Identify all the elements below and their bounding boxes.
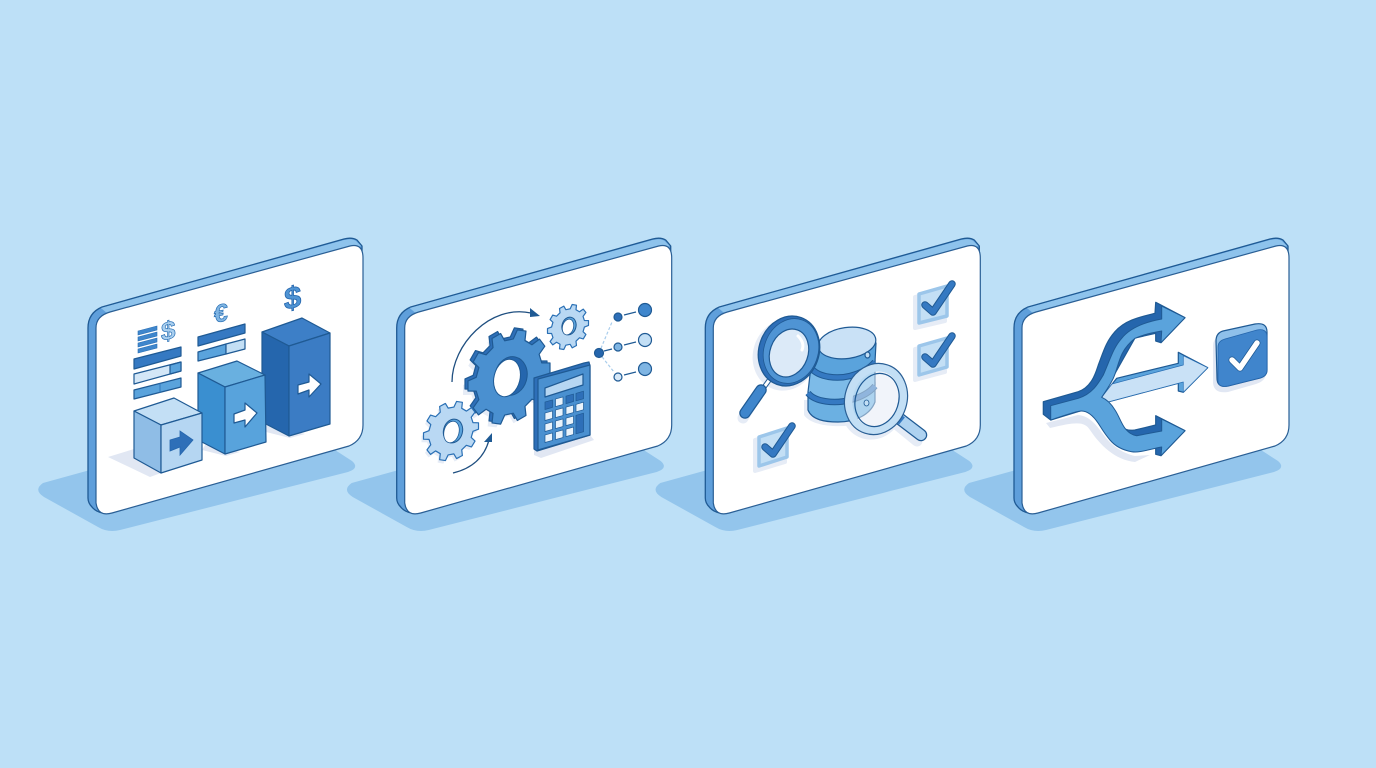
card shadow <box>964 450 1281 531</box>
fork shadow <box>1046 415 1150 462</box>
euro symbol: € <box>214 298 228 329</box>
medium cube <box>198 361 266 454</box>
check tile <box>1213 324 1267 392</box>
lower rotation arrow <box>453 433 492 473</box>
card slab <box>705 238 979 513</box>
card shadow <box>656 450 972 531</box>
card face <box>405 246 672 514</box>
card slab <box>1014 238 1288 513</box>
panel: branching decision <box>964 238 1289 531</box>
panel: gears and calculator <box>347 238 672 531</box>
card slab <box>397 238 671 513</box>
panel: cost bars <box>38 238 363 531</box>
calculator keys <box>545 391 584 442</box>
fork dark sides <box>1043 302 1185 456</box>
magnifier left <box>745 307 829 413</box>
large gear <box>463 321 550 435</box>
card shadow <box>347 450 664 531</box>
checkbox top <box>915 284 952 328</box>
fork front face <box>1051 306 1185 456</box>
small cube <box>134 398 202 473</box>
magnifier right <box>835 355 921 443</box>
card slab <box>88 238 362 513</box>
small gear bottom <box>422 397 478 468</box>
panel: data validation <box>656 238 980 531</box>
list icon <box>138 326 157 353</box>
card face <box>96 246 363 514</box>
node network <box>594 304 652 381</box>
checkbox middle <box>915 336 952 380</box>
dollar symbol: $ <box>161 314 176 347</box>
database <box>808 324 878 422</box>
soft shadow under cubes <box>108 424 305 477</box>
small gear top <box>548 301 588 353</box>
fork arrows <box>1043 302 1185 456</box>
soft icon shadows <box>743 311 917 448</box>
dollar symbol large: $ <box>284 279 301 317</box>
tall cube <box>262 318 330 436</box>
card face <box>1022 246 1289 514</box>
checkbox bottom <box>755 426 792 471</box>
middle column rows <box>198 324 245 361</box>
card face <box>713 246 980 514</box>
left column rows <box>134 347 181 399</box>
calculator <box>534 362 594 458</box>
middle arrow <box>1102 352 1208 402</box>
card shadow <box>38 450 355 531</box>
upper rotation arrow <box>452 308 540 382</box>
